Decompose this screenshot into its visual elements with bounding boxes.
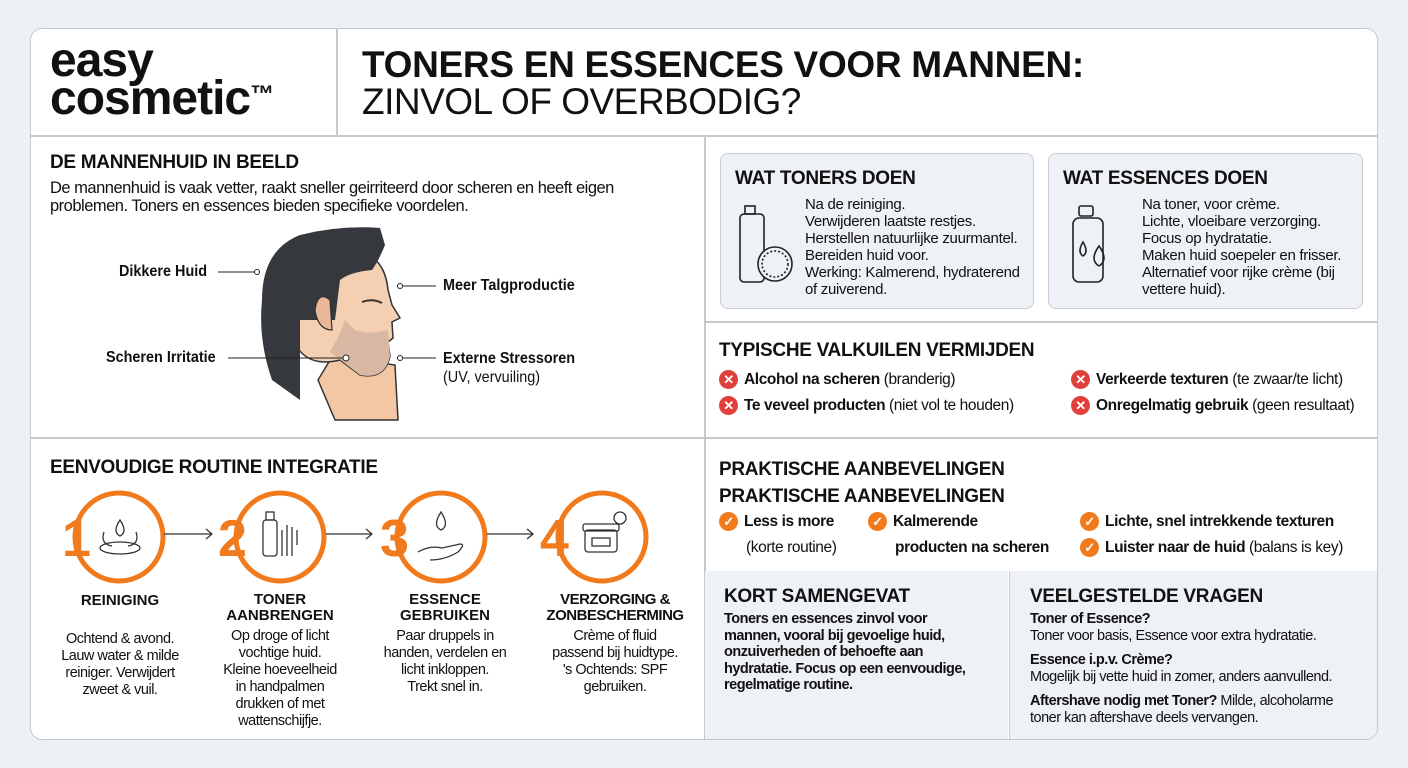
aanbevelingen list: Less is more: [744, 513, 834, 530]
card: wat toners doen: Herstellen natuurlijke zuurmantel.: [805, 230, 1017, 247]
step 3 text: ESSENCE: [409, 591, 481, 608]
step 1 text: Lauw water & milde: [61, 648, 179, 664]
panel: veelgestelde vragen: Mogelijk bij vette huid in zomer, anders aanvullend. Aftershave nodig met Toner? Milde, alcoholarme: [1030, 668, 1333, 709]
panel: veelgestelde vragen: Toner of Essence?: [1030, 611, 1150, 627]
routine steps: 2: [218, 510, 247, 568]
intro text: De mannenhuid is vaak vetter, raakt sneller geirriteerd door scheren en heeft eigen: [50, 179, 614, 197]
label: externe stressoren: (UV, vervuiling): [443, 369, 540, 386]
title: ZINVOL OF OVERBODIG?: [362, 81, 801, 122]
step 3 text: GEBRUIKEN: [400, 607, 490, 624]
step 2 text: [223, 591, 337, 729]
step 1 text: zweet & vuil.: [83, 682, 157, 698]
icon: essence bottle: [1072, 205, 1105, 283]
card: wat essences doen: Lichte, vloeibare verzorging.: [1142, 213, 1321, 230]
valkuilen list: ✕: [723, 372, 734, 387]
step 4 text: VERZORGING &: [560, 591, 670, 608]
panel: veelgestelde vragen: Toner voor basis, Essence voor extra hydratatie. Essence i.p.v. Crème?: [1030, 628, 1316, 668]
panel: kort samengevat: [705, 571, 1008, 739]
title: [362, 44, 1084, 122]
step 2 text: wattenschijfje.: [238, 713, 322, 729]
text: ✓: [1084, 540, 1095, 555]
step 4 text: gebruiken.: [584, 679, 646, 695]
step 4 text: 's Ochtends: SPF: [563, 662, 667, 678]
label: dikkere huid: Dikkere Huid: [119, 263, 207, 280]
step 3 text: handen, verdelen en: [384, 645, 506, 661]
card: wat essences doen: Maken huid soepeler en frisser.: [1142, 247, 1341, 264]
step 3 text: [384, 591, 506, 695]
step 2 text: in handpalmen: [236, 679, 324, 695]
logo: cosmetic™: [50, 72, 273, 125]
heading: aanbevelingen: [719, 459, 1005, 507]
heading: DE MANNENHUID IN BEELD: [50, 152, 299, 173]
heading: aanbevelingen: PRAKTISCHE AANBEVELINGEN: [719, 459, 1005, 480]
logo: easy: [50, 34, 153, 87]
card: wat toners doen: Bereiden huid voor.: [805, 247, 929, 264]
card: wat toners doen: Na de reiniging.: [805, 196, 905, 213]
panel: kort samengevat: onzuiverheden of behoefte aan: [724, 644, 923, 660]
step 1 text: REINIGING: [81, 592, 159, 609]
step 2 text: TONER: [254, 591, 306, 608]
card: wat essences doen: Na toner, voor crème.: [1142, 196, 1280, 213]
card: wat essences doen: WAT ESSENCES DOEN: [1063, 168, 1268, 189]
panel: mannenhuid: [50, 152, 614, 215]
routine steps: 1: [62, 510, 91, 568]
step 2 text: AANBRENGEN: [226, 607, 334, 624]
card: wat essences doen: Alternatief voor rijke crème (bij: [1142, 264, 1335, 281]
card: wat toners doen: Verwijderen laatste restjes.: [805, 213, 976, 230]
icon: toner bottle: [739, 205, 793, 283]
card: wat toners doen: of zuiverend.: [805, 281, 887, 298]
step 3 text: licht inkloppen.: [401, 662, 489, 678]
panel: veelgestelde vragen: toner kan aftershave deels vervangen.: [1030, 710, 1258, 726]
text: Kalmerende: [893, 513, 978, 530]
text: ✕: [1075, 372, 1086, 387]
label: scheren irritatie: Scheren Irritatie: [106, 349, 216, 366]
face illustration: [218, 227, 436, 421]
text: Lichte, snel intrekkende texturen: [1105, 513, 1334, 530]
logo: [50, 34, 273, 125]
valkuilen list: ✕: [723, 398, 734, 413]
panel: kort samengevat: KORT SAMENGEVAT: [724, 586, 910, 607]
step 3 text: Trekt snel in.: [407, 679, 483, 695]
label: externe stressoren: [443, 350, 575, 386]
heading: valkuilen: TYPISCHE VALKUILEN VERMIJDEN: [719, 340, 1034, 361]
text: ✓: [872, 514, 883, 529]
card: wat toners doen: WAT TONERS DOEN: [735, 168, 916, 189]
label: externe stressoren: Externe Stressoren: [443, 350, 575, 367]
aanbevelingen list: (korte routine): [746, 539, 836, 556]
intro text: [50, 179, 614, 215]
aanbevelingen list: ✓: [723, 514, 734, 529]
routine steps: [62, 490, 648, 584]
step 4 text: passend bij huidtype.: [552, 645, 678, 661]
step 2 text: vochtige huid.: [239, 645, 321, 661]
panel: kort samengevat: hydratatie. Focus op een eenvoudige,: [724, 660, 965, 676]
aanbevelingen list: [719, 512, 836, 556]
step 4 text: [546, 591, 684, 695]
title: TONERS EN ESSENCES VOOR MANNEN:: [362, 44, 1084, 85]
intro text: problemen. Toners en essences bieden specifieke voordelen.: [50, 197, 468, 215]
text: ✓: [1084, 514, 1095, 529]
card: wat essences doen: vettere huid).: [1142, 281, 1225, 298]
step 4 text: ZONBESCHERMING: [546, 607, 684, 624]
card: wat essences doen: Focus op hydratatie.: [1142, 230, 1272, 247]
panel: kort samengevat: regelmatige routine.: [724, 677, 853, 693]
routine steps: 4: [540, 510, 569, 568]
step 2 text: Op droge of licht: [231, 628, 329, 644]
panel: kort samengevat: Toners en essences zinvol voor: [724, 611, 927, 627]
card: wat toners doen: [720, 153, 1034, 309]
step 1 text: reiniger. Verwijdert: [65, 665, 175, 681]
valkuilen list: [719, 370, 1014, 415]
panel: kort samengevat: mannen, vooral bij gevoelige huid,: [724, 628, 945, 644]
panel: veelgestelde vragen: VEELGESTELDE VRAGEN: [1030, 586, 1263, 607]
step 2 text: drukken of met: [236, 696, 324, 712]
text: Luister naar de huid (balans is key): [1105, 539, 1343, 556]
panel: veelgestelde vragen: [1009, 571, 1377, 739]
heading: aanbevelingen: PRAKTISCHE AANBEVELINGEN: [719, 486, 1005, 507]
heading: routine: EENVOUDIGE ROUTINE INTEGRATIE: [50, 457, 378, 478]
card: wat toners doen: Werking: Kalmerend, hydraterend: [805, 264, 1020, 281]
valkuilen list: Alcohol na scheren (branderig): [744, 371, 955, 388]
step 2 text: Kleine hoeveelheid: [223, 662, 337, 678]
text: ✕: [1075, 398, 1086, 413]
text: Verkeerde texturen (te zwaar/te licht): [1096, 371, 1343, 388]
text: producten na scheren: [895, 539, 1049, 556]
routine steps: 3: [380, 510, 409, 568]
step 1 text: [61, 592, 179, 698]
label: meer talgproductie: Meer Talgproductie: [443, 277, 575, 294]
valkuilen list: Te veveel producten (niet vol te houden): [744, 397, 1014, 414]
step 1 text: Ochtend & avond.: [66, 631, 174, 647]
step 3 text: Paar druppels in: [396, 628, 494, 644]
step 4 text: Crème of fluid: [573, 628, 657, 644]
text: Onregelmatig gebruik (geen resultaat): [1096, 397, 1354, 414]
card: wat essences doen: [1048, 153, 1363, 309]
